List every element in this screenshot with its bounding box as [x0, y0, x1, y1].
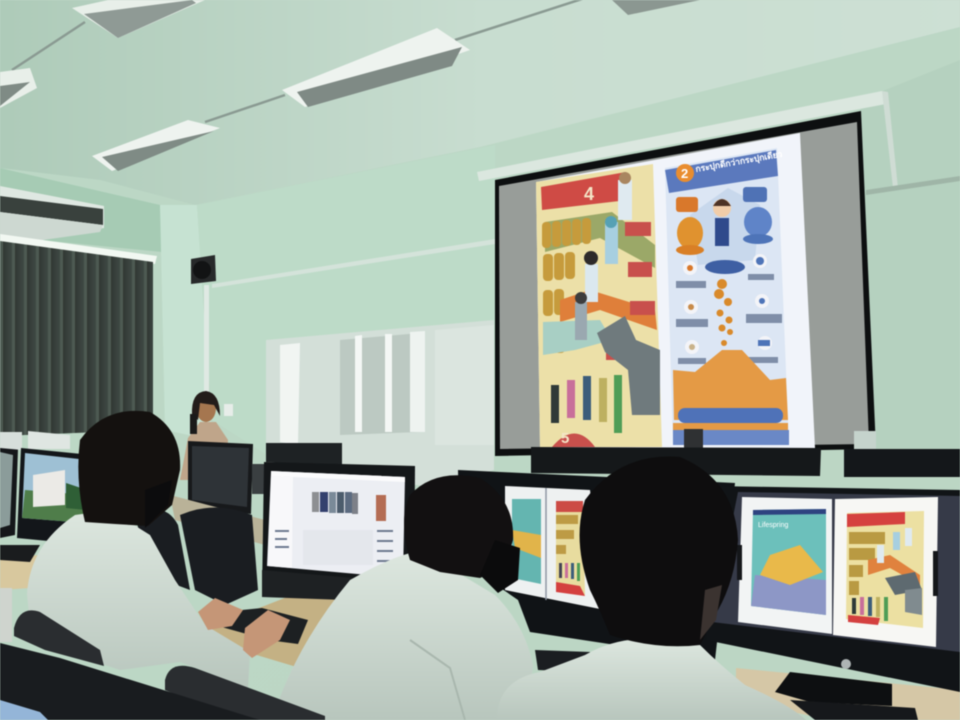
right thumbnails [376, 495, 386, 521]
monitor stand [775, 672, 892, 706]
keyboard foreground centre [535, 650, 590, 672]
student left: shirt [27, 510, 250, 688]
bank building [690, 188, 760, 265]
desk far left [0, 555, 40, 590]
viewer side arrows [737, 545, 742, 580]
desk leg [0, 588, 12, 642]
student right: shirt [497, 639, 806, 720]
coin row 2 [543, 252, 575, 281]
ceiling light 4 [0, 68, 37, 108]
silhouette on screen [684, 429, 703, 448]
sidebar lines [275, 530, 393, 562]
back row monitor right [844, 449, 960, 477]
green band [545, 212, 655, 268]
blue title banner [665, 150, 778, 193]
foreground chair left [14, 610, 104, 666]
middle monitor [458, 470, 735, 660]
back row monitor left [266, 443, 342, 466]
blue piggy bank [743, 187, 773, 244]
benefit caption lines [676, 274, 782, 364]
wall column [160, 205, 212, 440]
infographic: right poster [665, 148, 789, 445]
foreground monitor [0, 643, 260, 720]
keyboard far left [0, 545, 40, 562]
air conditioner [0, 186, 104, 246]
falling coins [714, 279, 733, 346]
orange band [560, 290, 657, 330]
corner sticker [854, 431, 876, 449]
student left: head [78, 411, 180, 528]
chairs in the middle [135, 508, 258, 605]
desk centre [208, 592, 340, 668]
orange piggy bank [676, 197, 704, 255]
poster numeral 4: 4 [584, 184, 594, 204]
red title banner [541, 172, 628, 210]
small figures [877, 545, 884, 563]
ceiling light 3 [92, 120, 220, 171]
title badge number 2 [676, 164, 694, 182]
back row monitor centre [531, 447, 821, 476]
teal floor [543, 320, 612, 355]
column chart of figures [551, 375, 622, 433]
poster numeral 5: 5 [561, 430, 569, 447]
ceiling conduits [12, 0, 585, 122]
right page [833, 497, 938, 647]
whiteboard [266, 320, 494, 487]
desk mid [170, 495, 265, 545]
side wall lower [197, 145, 495, 455]
left page [738, 497, 832, 634]
coin row 1 [542, 218, 591, 248]
screen poster yellow [556, 501, 585, 595]
story thumbnails [312, 492, 358, 514]
student middle: shirt [275, 553, 533, 720]
red footer badge [552, 434, 595, 447]
orange strip [673, 423, 788, 430]
monitor far left [17, 448, 92, 545]
ceiling light 1 [72, 0, 205, 38]
desk right [736, 668, 960, 720]
teacher [180, 391, 228, 480]
left wall section [0, 168, 162, 252]
wall trunking [212, 239, 495, 288]
facebook monitor [262, 462, 415, 600]
feed card [303, 530, 373, 565]
projector screen [495, 111, 876, 456]
vertical conduit [204, 285, 209, 395]
person [713, 199, 731, 246]
speaker [191, 255, 216, 284]
crowd of people [597, 316, 660, 415]
banner heading: กระปุกดีกว่ากระปุกเดียว [695, 149, 783, 175]
blue platform [705, 260, 745, 274]
projector screen housing [477, 91, 960, 195]
infographic: left poster [536, 164, 662, 447]
small background monitors [0, 431, 266, 514]
ceiling [0, 0, 960, 205]
far left monitor edge [0, 445, 18, 538]
ceiling light 5 [612, 0, 700, 15]
HP logo [841, 659, 851, 669]
coin row 3 [543, 289, 564, 316]
profile sidebar [268, 476, 293, 568]
window glow [0, 234, 157, 264]
coin row 4 [544, 327, 565, 353]
screen poster teal [512, 499, 541, 584]
screen poster yellow [846, 511, 924, 628]
student right: head [580, 457, 738, 646]
left wall socket [224, 404, 233, 416]
poster title on monitor: Lifespring [758, 522, 788, 529]
right wall shade [860, 60, 960, 450]
bottom blue pill [678, 408, 783, 423]
large right monitor [706, 486, 960, 692]
figures on poster [575, 172, 632, 340]
blue footer [673, 430, 789, 445]
gold brick pyramid [673, 350, 788, 420]
student middle: head [404, 475, 520, 593]
red salary tags [606, 222, 655, 360]
benefit icons [683, 254, 772, 354]
keyboard centre [218, 608, 308, 644]
screen poster teal [751, 509, 826, 615]
window blinds [0, 241, 153, 436]
projected slide background [536, 133, 815, 448]
keyboard right [790, 700, 918, 720]
ceiling light 2 [282, 28, 470, 107]
student left: near hand [243, 610, 290, 658]
title badge number 2: 2 [681, 166, 688, 181]
student left: far hand [198, 598, 243, 630]
foreground chair right [165, 666, 325, 720]
